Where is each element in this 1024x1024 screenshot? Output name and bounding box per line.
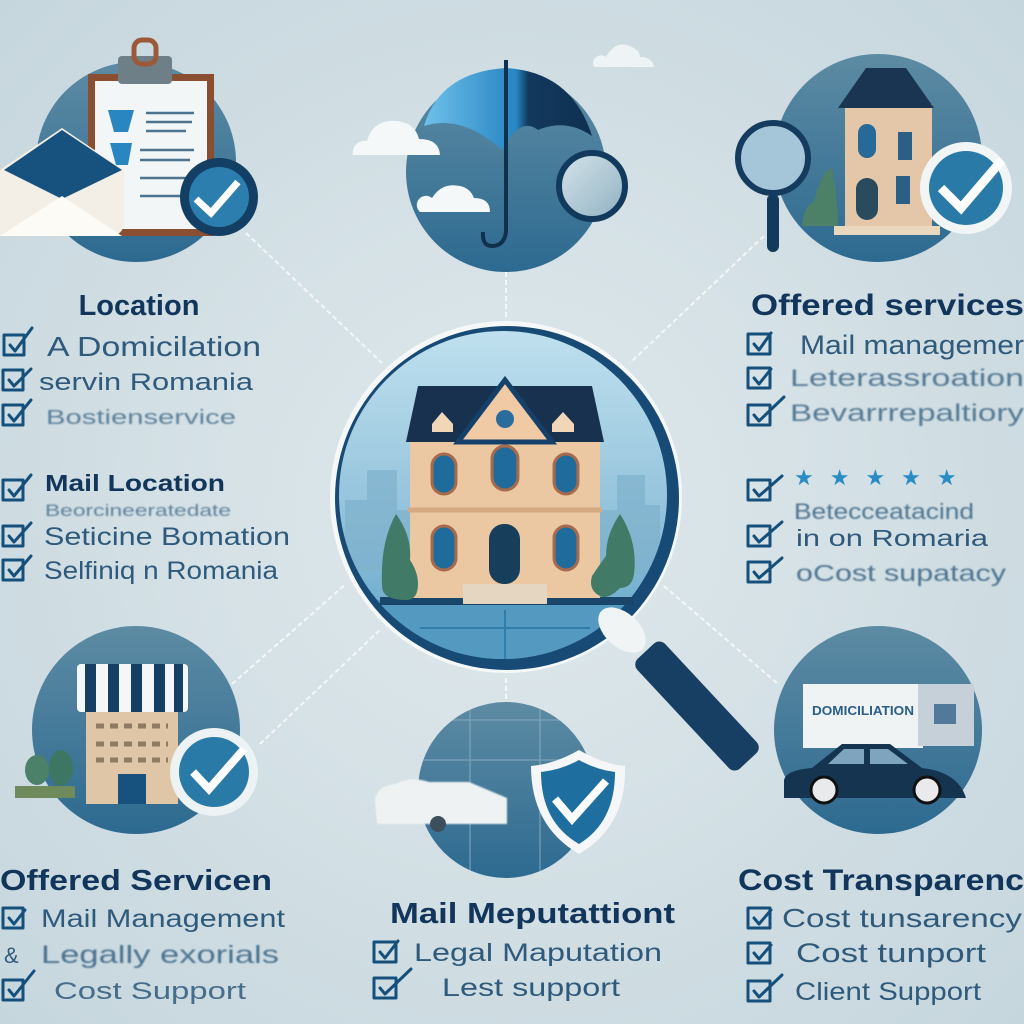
text block: mail location: Seticine Bomation [44, 523, 290, 551]
text block: mail reputation: Legal Maputation [414, 939, 662, 967]
magnifier handle [590, 599, 762, 774]
text block: location: Location [79, 290, 199, 322]
text block: mail location [3, 470, 290, 585]
text block: location: A Domicilation [47, 331, 261, 362]
text block: location: servin Romania [39, 369, 254, 396]
central house [406, 380, 604, 604]
text block: mail location: Selfiniq n Romania [44, 557, 278, 585]
text block: cost transparency: Cost Transparenc [738, 864, 1024, 897]
text block: offered services bottom left: Cost Support [54, 978, 246, 1005]
text block: location: Bostienservice [46, 407, 236, 429]
trees [382, 514, 635, 600]
icon: house with magnifier and check [738, 54, 1012, 262]
text block: offered services top [748, 289, 1024, 427]
text block: ratings: Betecceatacind [794, 499, 974, 524]
text block: offered services top: Bevarrrepaltiory [790, 400, 1024, 427]
text block: cost transparency [738, 864, 1024, 1006]
icon: umbrella with cloud and magnifier [353, 45, 654, 272]
text block: cost transparency: Client Support [795, 978, 981, 1006]
text block: offered services top: Offered services [751, 289, 1024, 322]
text block: location [3, 290, 261, 429]
lens ground [377, 600, 624, 659]
text block: offered services bottom left: Mail Management [41, 905, 285, 933]
text block: offered services bottom left: & [4, 943, 19, 968]
text block: mail location: Mail Location [45, 470, 225, 496]
text block: ratings: in on Romaria [796, 525, 988, 551]
icon: van and shield [375, 700, 625, 880]
text block: mail reputation [374, 898, 675, 1002]
connector lines [232, 233, 778, 744]
text block: mail location: Beorcineeratedate [45, 501, 231, 520]
text block: mail reputation: Mail Meputattiont [390, 898, 675, 930]
text block: offered services bottom left [0, 865, 285, 1005]
icon: truck and car: DOMICILIATION [812, 703, 914, 718]
text block: offered services top: Leterassroation [790, 365, 1024, 392]
text block: offered services top: Mail managemer [800, 330, 1024, 360]
icon: clipboard with envelope and check [0, 40, 258, 262]
text block: offered services bottom left: Legally exorials [41, 941, 279, 969]
icon: storefront with check [15, 626, 258, 834]
text block: cost transparency: Cost tunsarency [782, 903, 1022, 933]
center magnifier [330, 321, 762, 774]
text block: offered services bottom left: Offered Servicen [0, 865, 272, 897]
text block: ratings: oCost supatacy [796, 560, 1007, 586]
text block: cost transparency: Cost tunport [796, 938, 987, 968]
city silhouette [345, 470, 660, 575]
rating stars: ★★★★★ [794, 465, 973, 490]
text block: ratings [748, 465, 1007, 586]
text block: mail reputation: Lest support [442, 974, 620, 1002]
icon: truck and car [774, 626, 982, 834]
